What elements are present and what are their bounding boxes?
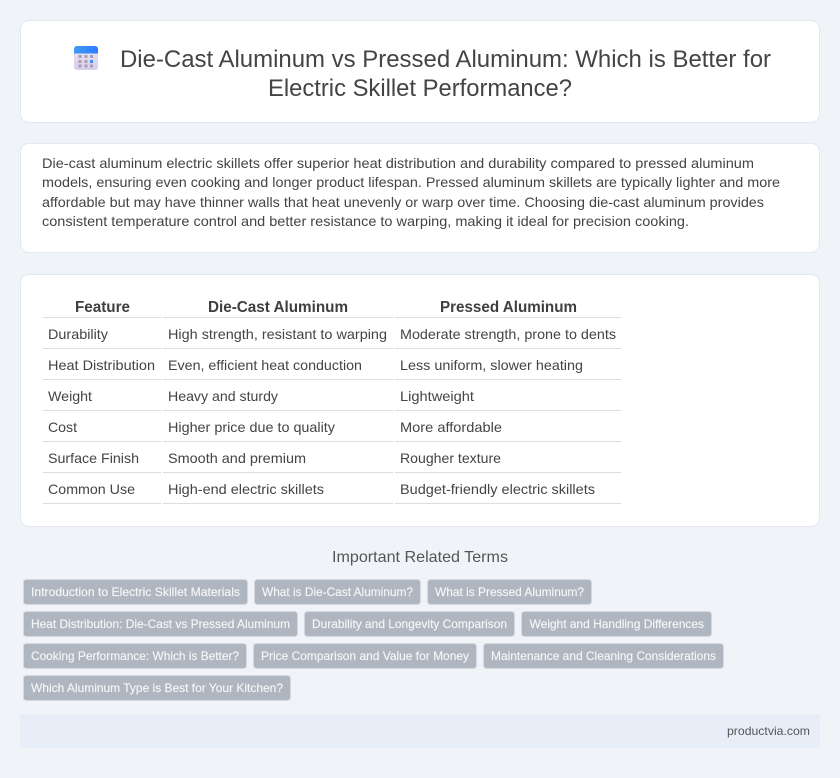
chip	[484, 644, 724, 668]
table header: Pressed Aluminum	[440, 299, 577, 316]
chip: Durability and Longevity Comparison	[312, 617, 507, 631]
chip: What is Pressed Aluminum?	[435, 585, 584, 599]
related term chips	[24, 580, 724, 700]
text block: summary paragraph	[42, 155, 780, 229]
title: Die-Cast Aluminum vs Pressed Aluminum: Which is Better for	[120, 46, 771, 73]
chip: Cooking Performance: Which is Better?	[31, 649, 239, 663]
table row: Surface Finish: Smooth and premium	[168, 450, 306, 466]
table row: Durability: Moderate strength, prone to dents	[400, 326, 616, 342]
table row: Weight	[48, 388, 474, 404]
panel: title header	[20, 20, 820, 122]
chip	[24, 612, 298, 636]
panel: summary	[20, 144, 820, 252]
table header	[75, 299, 577, 316]
table header: Feature	[75, 299, 130, 316]
table row: Surface Finish: Rougher texture	[400, 450, 501, 466]
table row: Durability	[48, 326, 616, 342]
chip: Which Aluminum Type is Best for Your Kitchen?	[31, 681, 283, 695]
table row: Durability: High strength, resistant to warping	[168, 326, 387, 342]
panel: comparison table	[20, 274, 820, 526]
table row: Common Use: High-end electric skillets	[168, 481, 324, 497]
chip: Weight and Handling Differences	[530, 617, 704, 631]
title	[120, 46, 771, 102]
table row: Heat Distribution: Even, efficient heat conduction	[168, 357, 362, 373]
table row: Surface Finish: Surface Finish	[48, 450, 139, 466]
chip	[522, 612, 712, 636]
table row: Heat Distribution	[48, 357, 583, 373]
text block: summary paragraph: Die-cast aluminum electric skillets offer superior heat distribution and durability compared to pressed aluminum	[42, 155, 754, 171]
table row: Weight: Lightweight	[400, 388, 474, 404]
footer bar	[20, 714, 820, 748]
text block: summary paragraph: affordable but may have thinner walls that heat unevenly or warp over time. Choosing die-cast aluminum provides	[42, 194, 764, 210]
chip	[304, 612, 514, 636]
table row: Heat Distribution: Heat Distribution	[48, 357, 155, 373]
table row: Weight: Heavy and sturdy	[168, 388, 278, 404]
chip	[254, 580, 420, 604]
table row: Cost: More affordable	[400, 419, 502, 435]
table row: Weight: Weight	[48, 388, 92, 404]
table row: Common Use	[48, 481, 595, 497]
table header: Die-Cast Aluminum	[208, 299, 348, 316]
text block: summary paragraph: consistent temperature control and better resistance to warping, making it ideal for precision cooking.	[42, 213, 689, 229]
chip	[24, 644, 246, 668]
table row: Cost: Cost	[48, 419, 77, 435]
table row: Surface Finish	[48, 450, 501, 466]
chip: Heat Distribution: Die-Cast vs Pressed Aluminum	[31, 617, 290, 631]
chip	[24, 676, 290, 700]
chip	[24, 580, 248, 604]
table row: Common Use: Budget-friendly electric skillets	[400, 481, 595, 497]
table row: Common Use: Common Use	[48, 481, 135, 497]
table row: Durability: Durability	[48, 326, 108, 342]
chip: Maintenance and Cleaning Considerations	[491, 649, 716, 663]
chip	[254, 644, 476, 668]
footer source text: productvia.com	[727, 724, 810, 738]
title: Electric Skillet Performance?	[268, 75, 572, 102]
chip: What is Die-Cast Aluminum?	[262, 585, 413, 599]
chip	[428, 580, 592, 604]
table row: Cost	[48, 419, 502, 435]
chip: Price Comparison and Value for Money	[261, 649, 469, 663]
text block: summary paragraph: models, ensuring even cooking and longer product lifespan. Pressed aluminum skillets are typically lighter and more	[42, 174, 780, 190]
table row: Heat Distribution: Less uniform, slower heating	[400, 357, 583, 373]
chip: Introduction to Electric Skillet Materials	[31, 585, 240, 599]
icon: calendar	[74, 46, 98, 70]
table row: Cost: Higher price due to quality	[168, 419, 335, 435]
heading: related terms: Important Related Terms	[332, 549, 508, 566]
